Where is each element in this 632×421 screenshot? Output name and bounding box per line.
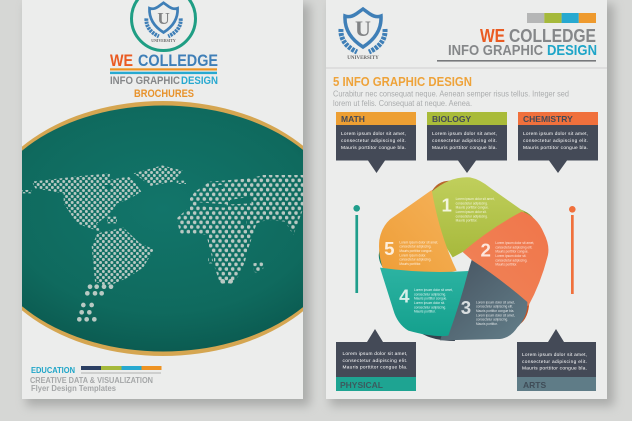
intro text: Curabitur nec consequat neque. Aenean semper risus tellus. Integer sed (333, 90, 569, 98)
logo: round university badge: UNIVERSITY (151, 39, 176, 43)
panel: left cover page (22, 0, 303, 399)
petal 4 teal: 4 (399, 286, 410, 307)
petal 5 yellow-orange: consectetur adipiscing. (399, 258, 432, 262)
callout: arts: ARTS (523, 380, 546, 390)
footer text: Flyer Design Templates (31, 384, 117, 393)
callout: biology: Mauris porttitor congue bla. (432, 145, 497, 151)
subtitle: info graphic design: DESIGN (547, 42, 597, 59)
petal 2 orange: Lorem ipsum dolor sit amet, (495, 241, 534, 245)
petal 5 yellow-orange: Mauris porttitor congue. (399, 249, 433, 253)
petal 4 teal: Lorem ipsum dolor sit. (414, 301, 445, 305)
callout: physical: PHYSICAL (340, 380, 383, 390)
callout: biology: consectetur adipiscing elit. (432, 138, 497, 144)
callout: chemistry: Lorem ipsum dolor sit amet, (523, 131, 588, 137)
header colour bar (527, 13, 596, 23)
petal 1 green: Lorem ipsum dolor sit amet, (456, 197, 495, 201)
petal 2 orange (463, 212, 548, 306)
subtitle: info graphic design: DESIGN (181, 75, 218, 87)
callout: biology (427, 112, 507, 173)
heading: 5 info graphic design: 5 INFO GRAPHIC DESIGN (333, 74, 472, 89)
chart: five-petal pentagon (379, 177, 548, 341)
callout: math: Mauris porttitor congue bla. (341, 145, 406, 151)
callout: chemistry (518, 112, 598, 173)
callout: chemistry: consectetur adipiscing elit. (523, 138, 588, 144)
left teal pin (353, 205, 360, 293)
footer text: CREATIVE DATA & VISUALIZATION (30, 376, 153, 385)
petal 1 green (432, 177, 527, 257)
petal 3 slate: Mauris porttitor. (476, 322, 498, 326)
petal 5 yellow-orange (379, 190, 457, 280)
logo: round university badge (132, 0, 196, 50)
world map of dots (20, 163, 303, 322)
callout: physical: Lorem ipsum dolor sit amet, (342, 351, 408, 357)
callout: math: MATH (341, 114, 365, 124)
panel: teal oval with gold ring (0, 101, 347, 356)
back flaps (379, 181, 539, 341)
petal 3 slate: 3 (461, 297, 471, 318)
callout: physical (336, 329, 416, 391)
petal 1 green: Mauris porttitor congue. (456, 206, 489, 210)
callout: math: consectetur adipiscing elit. (341, 138, 406, 144)
petal 3 slate (440, 260, 527, 340)
logo: round university badge: U (157, 9, 170, 28)
subtitle: info graphic design: INFO GRAPHIC (448, 42, 543, 59)
petal 3 slate: consectetur adipiscing. (476, 318, 508, 322)
callout: physical: consectetur adipiscing elit. (342, 358, 408, 364)
petal 4 teal: Mauris porttitor congue. (414, 297, 447, 301)
petal 4 teal: Mauris porttitor. (414, 310, 436, 314)
petal 2 orange: 2 (480, 240, 491, 261)
title: we colledge (480, 25, 596, 46)
logo: university shield (341, 9, 385, 61)
petal 1 green: Mauris porttitor. (456, 219, 478, 223)
petal 5 yellow-orange: 5 (384, 238, 395, 259)
petal 2 orange: Mauris porttitor. (495, 263, 517, 267)
callout: math (336, 112, 416, 173)
callout: chemistry: CHEMISTRY (523, 114, 573, 124)
petal 2 orange: consectetur adipiscing elit. (495, 245, 532, 249)
title underlines (110, 68, 217, 74)
title: we colledge (110, 51, 218, 70)
logo: university shield: U (355, 16, 371, 41)
petal 4 teal (380, 268, 468, 336)
callout: biology: BIOLOGY (432, 114, 472, 124)
petal 5 yellow-orange: consectetur adipiscing. (399, 245, 432, 249)
title: we colledge: COLLEDGE (509, 25, 596, 46)
footer text (30, 376, 153, 393)
callout: physical: Mauris porttitor congue bla. (342, 364, 408, 370)
petal 5 yellow-orange: Lorem ipsum dolor. (399, 253, 426, 257)
intro text: lorem ut felis. Consequat at neque. Aenea. (333, 99, 472, 108)
callout: arts: consectetur adipiscing elit. (522, 359, 587, 365)
callout: arts (517, 329, 596, 391)
petal 3 slate: Lorem ipsum dolor sit amet, (476, 313, 515, 317)
petal 4 teal: Lorem ipsum dolor sit amet, (414, 288, 453, 292)
petal 3 slate: Mauris porttitor congue bla. (476, 309, 514, 313)
footer label: education: EDUCATION (31, 366, 75, 375)
footer colour bar (81, 366, 162, 374)
callout: arts: Lorem ipsum dolor sit amet, (522, 352, 587, 358)
subtitle: info graphic design: INFO GRAPHIC (110, 75, 180, 87)
title: we colledge: COLLEDGE (138, 51, 218, 70)
petal 2 orange: Mauris porttitor congue. (495, 250, 529, 254)
petal 2 orange: Lorem ipsum dolor sit. (495, 254, 527, 258)
petal 3 slate: consectetur adipiscing elit. (476, 305, 513, 309)
logo: university shield: UNIVERSITY (347, 56, 379, 61)
petal 3 slate: Lorem ipsum dolor sit amet, (476, 300, 515, 304)
petal 1 green: consectetur adipiscing. (456, 201, 488, 205)
petal 2 orange: consectetur adipiscing. (495, 258, 528, 262)
petal 1 green: Lorem ipsum dolor sit. (456, 210, 487, 214)
callout: biology: Lorem ipsum dolor sit amet, (432, 131, 497, 137)
petal 4 teal: consectetur adipiscing. (414, 292, 446, 296)
petal 5 yellow-orange: Lorem ipsum dolor sit amet. (399, 240, 438, 244)
title: we colledge: WE (480, 25, 505, 46)
right orange pin (569, 206, 576, 294)
petal 1 green: consectetur adipiscing. (456, 214, 488, 218)
callout: chemistry: Mauris porttitor congue bla. (523, 145, 588, 151)
subtitle: brochures: BROCHURES (134, 88, 194, 100)
petal 1 green: 1 (441, 195, 452, 216)
petal 5 yellow-orange: Mauris porttitor. (399, 262, 421, 266)
callout: arts: Mauris porttitor congue bla. (522, 366, 587, 372)
title: we colledge: WE (110, 51, 133, 70)
panel: right infographic page (326, 0, 607, 399)
callout: math: Lorem ipsum dolor sit amet, (341, 131, 406, 137)
intro text (333, 90, 569, 108)
petal 4 teal: consectetur adipiscing. (414, 305, 446, 309)
